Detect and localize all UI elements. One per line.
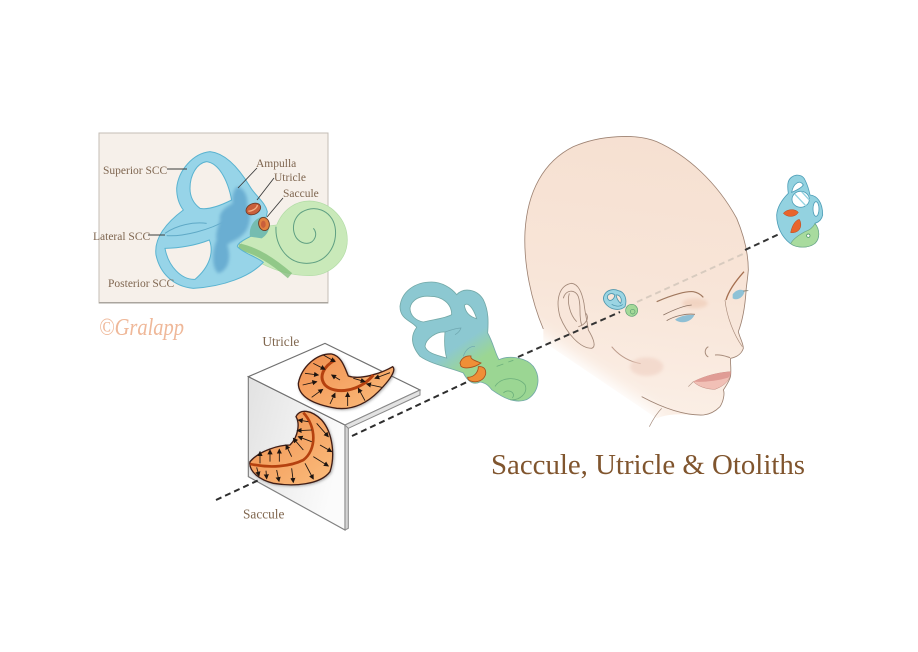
inset illustration: labyrinth	[156, 152, 347, 288]
enlarged inner ear model	[400, 282, 538, 401]
label: Ampulla: Ampulla	[256, 158, 296, 170]
label: Saccule: Saccule	[243, 507, 285, 522]
label: Utricle: Utricle	[262, 334, 299, 349]
face skin	[525, 136, 748, 418]
left brow shadow	[682, 298, 708, 308]
label: Saccule: Saccule	[283, 188, 319, 200]
green cochlea	[791, 224, 819, 247]
far side cheek and nose bridge	[725, 300, 742, 347]
saccule chamber	[250, 217, 269, 238]
utricle otolith map	[298, 354, 394, 409]
right eye and brow	[726, 272, 748, 300]
small inner ear beyond the head	[777, 175, 823, 247]
otolith: utricle	[783, 210, 798, 216]
otolith: saccule	[791, 219, 801, 233]
cheek shading	[630, 357, 663, 376]
box shelf with utricle	[248, 343, 420, 425]
vestibule chambers	[213, 187, 250, 273]
neck fade	[470, 292, 673, 462]
left eye and brow	[657, 292, 703, 322]
orange otoliths: utricle	[460, 356, 481, 368]
box wall with saccule	[248, 377, 345, 530]
copyright signature: ©Gralapp	[99, 315, 184, 341]
panel: inner ear anatomy inset	[93, 133, 347, 304]
nose	[705, 347, 730, 358]
label: Posterior SCC: Posterior SCC	[108, 278, 174, 290]
labyrinth silhouette	[400, 282, 538, 401]
label: Utricle: Utricle	[274, 172, 306, 184]
utricle in inset	[244, 201, 263, 217]
box showing otolithic plane orientation	[243, 334, 420, 530]
inner ear located in head	[603, 290, 638, 316]
saccule otolith map	[250, 411, 333, 485]
lips	[688, 372, 731, 389]
saccule in inset	[257, 216, 271, 232]
orange otoliths: saccule	[468, 367, 486, 382]
title: Saccule, Utricle & Otoliths	[491, 449, 805, 481]
ear	[558, 283, 594, 348]
head illustration	[470, 136, 748, 462]
blue labyrinth silhouette with canal openings	[156, 152, 267, 288]
canal crossing lines	[445, 328, 475, 356]
neck line	[649, 408, 662, 427]
label: Superior SCC: Superior SCC	[103, 165, 168, 177]
face contour	[525, 136, 748, 415]
cochlea whorls	[495, 360, 526, 400]
cochlea	[238, 201, 347, 276]
leader lines	[148, 168, 283, 235]
label: Lateral SCC: Lateral SCC	[93, 231, 150, 243]
cheek crease	[612, 347, 641, 364]
dashed axis line: through the head and ear models	[216, 229, 790, 500]
lateral semicircular canal	[165, 220, 227, 236]
canal openings	[792, 182, 819, 216]
